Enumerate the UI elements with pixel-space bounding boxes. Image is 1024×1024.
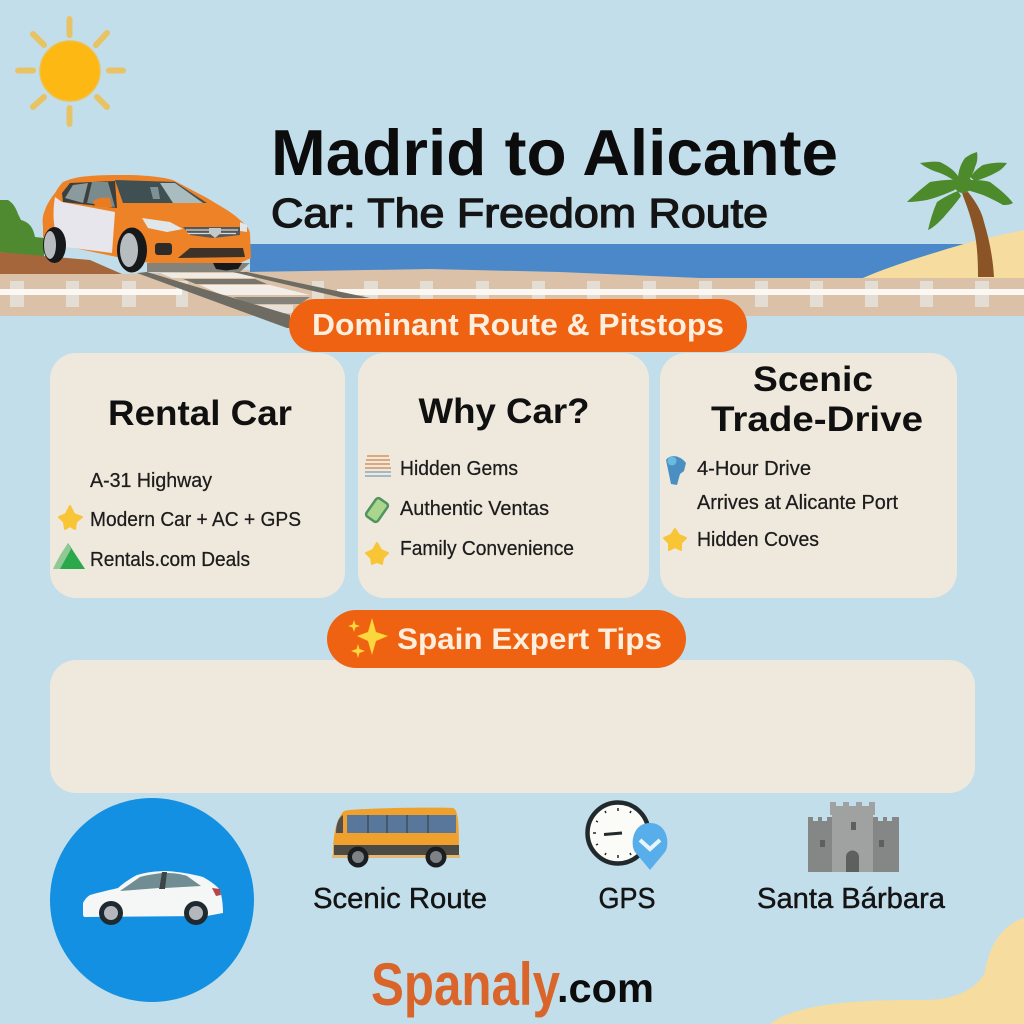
icon: castle [808,802,899,872]
decoration: corner sand [770,918,1024,1024]
sleepers and rail [10,281,989,307]
heading: why car: Why Car? [418,392,590,431]
list item: hidden gems: Hidden Gems [400,458,518,480]
list item: authentic ventas: Authentic Ventas [400,498,549,520]
icon: green tent [53,543,85,569]
grille [183,227,240,238]
icon: star [366,543,388,564]
icon: palm tree [907,152,1013,277]
list item: four hour drive: 4-Hour Drive [697,458,811,480]
icon: sun [18,19,123,124]
heading: rental car: Rental Car [108,394,292,433]
list item: A-31 highway: A-31 Highway [90,470,212,492]
icon: white car in blue circle [50,798,254,1002]
windshield [115,180,207,203]
icon: stacked lines [365,456,391,476]
logo: spanaly.com: Spanaly [371,951,561,1018]
list item: arrives port: Arrives at Alicante Port [697,492,898,514]
dark window frame [62,181,117,208]
shrub [0,200,44,258]
panel: why car [358,353,649,598]
ground [0,252,122,274]
subtitle: Car: The Freedom Route [271,190,768,236]
side windows [65,183,88,203]
perspective track [137,263,370,328]
icon: star [59,506,82,529]
sea [250,244,970,278]
list item: hidden coves: Hidden Coves [697,529,819,551]
panel: scenic trade-drive: Trade-Drive [711,400,923,439]
list item: family convenience: Family Convenience [400,538,574,560]
label: santa barbara: Santa Bárbara [757,883,946,915]
list item: modern car: Modern Car + AC + GPS [90,509,301,531]
pill heading: spain expert tips: Spain Expert Tips [397,623,662,656]
panel: scenic trade-drive [660,353,957,598]
icon: sparkles [348,618,388,658]
railway band [0,267,1024,316]
pill heading: dominant route [289,299,747,352]
title: Madrid to Alicante [271,116,838,189]
label: GPS: GPS [598,883,656,915]
logo: spanaly.com: .com [557,965,654,1011]
icon: green ticket [365,497,389,523]
pill heading: dominant route: Dominant Route & Pitstops [312,307,724,342]
icon: blue marker [666,456,686,485]
heading: scenic trade-drive: Scenic [753,360,873,399]
headlight [142,218,183,232]
icon: orange hatchback car [43,175,251,272]
icon: clock with GPS pin [588,802,667,870]
wheels [117,228,147,272]
mirror [93,198,112,207]
icon: star [664,529,686,550]
label: scenic route: Scenic Route [313,883,487,915]
icon: orange bus [332,808,460,868]
car body [43,175,251,263]
lower intake [178,248,245,258]
list item: rentals deals: Rentals.com Deals [90,549,250,571]
panel: expert tips empty box [50,660,975,793]
panel: rental car [50,353,345,598]
beach [863,230,1024,278]
white door panel [54,197,115,253]
pill heading: spain expert tips [327,610,686,668]
scene: road and coast band [0,200,1024,328]
